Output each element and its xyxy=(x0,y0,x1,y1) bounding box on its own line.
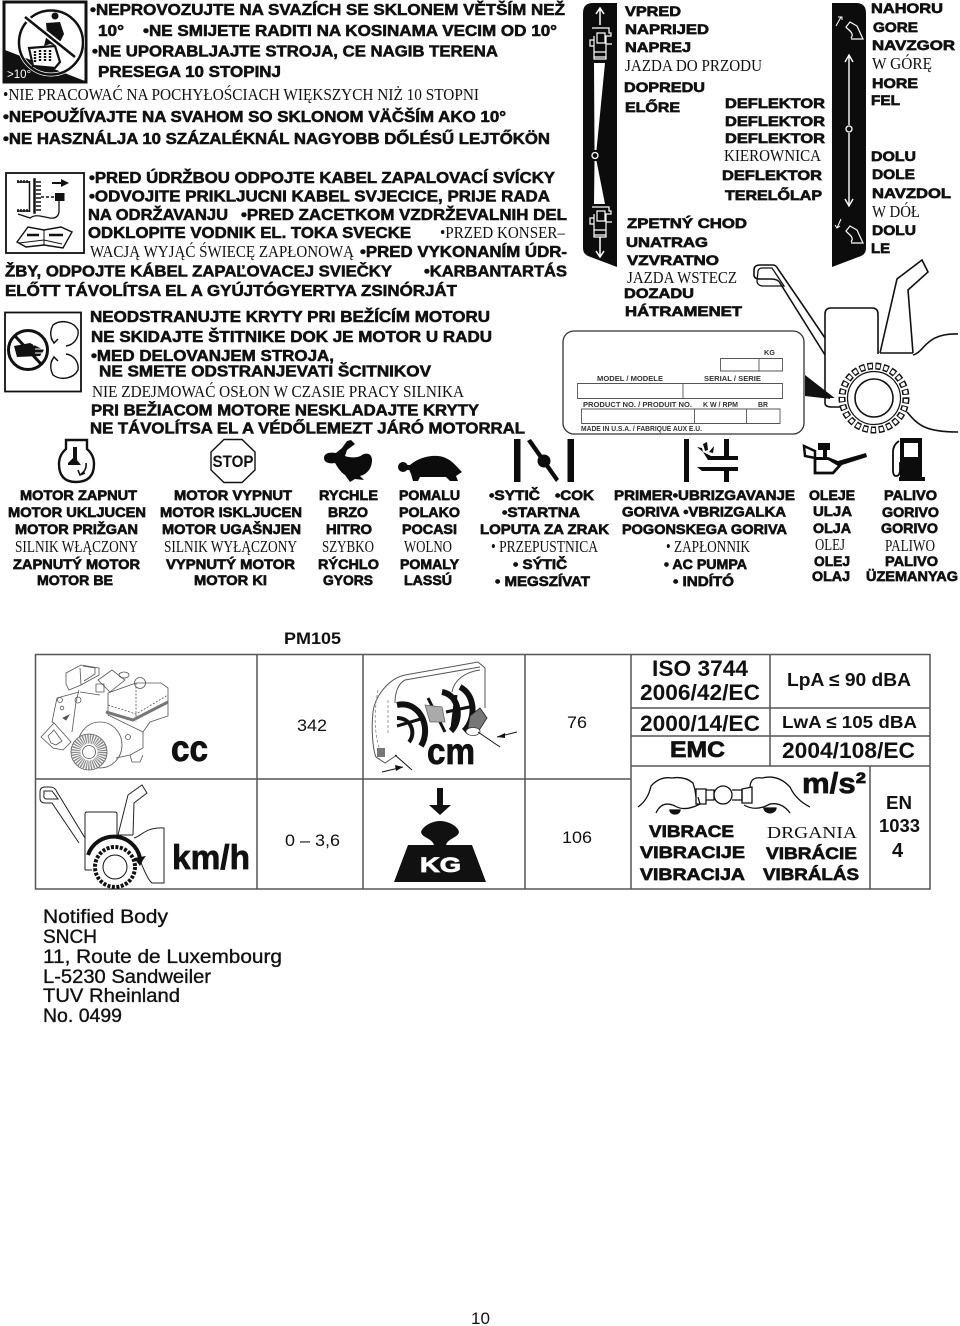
panel: model plate: PRODUCT NO. / PRODUIT NO. xyxy=(583,400,692,409)
label: motor off: VYPNUTÝ MOTOR xyxy=(166,555,295,572)
standards cells: 2004/108/EC xyxy=(782,738,915,763)
guard warning text: NE TÁVOLÍTSA EL A VÉDŐLEMEZT JÁRÓ MOTORRAL xyxy=(90,420,525,438)
up labels xyxy=(871,0,955,108)
label: motor on: ZAPNUTÝ MOTOR xyxy=(13,555,140,572)
icon: forward reverse bar xyxy=(583,3,617,267)
panel: model plate: K W / RPM xyxy=(703,400,738,409)
icon: weight xyxy=(394,788,486,882)
label: fuel xyxy=(866,487,958,584)
label: slow xyxy=(399,487,460,588)
maintenance warning text: ŽBY, ODPOJTE KÁBEL ZAPAĽOVACEJ SVIEČKY xyxy=(5,262,392,280)
label: primer xyxy=(614,487,795,589)
label: motor off: MOTOR ISKLJUCEN xyxy=(160,504,302,520)
maintenance warning text: •KARBANTARTÁS xyxy=(424,264,567,280)
label: fuel: GORIVO xyxy=(881,520,938,536)
forward labels: NAPREJ xyxy=(625,39,691,55)
label: primer: • INDÍTÓ xyxy=(673,572,734,589)
panel: model plate: BR xyxy=(758,400,769,409)
down labels: DOLE xyxy=(872,166,915,182)
reverse labels: DOZADU xyxy=(624,285,694,301)
down labels: W DÓŁ xyxy=(872,202,920,221)
icon: up down bar xyxy=(832,3,866,267)
deflector labels: KIEROWNICA xyxy=(724,146,822,165)
maintenance warning text: WACJĄ WYJĄĆ ŚWIECĘ ZAPŁONOWĄ xyxy=(90,242,355,261)
notified body address: No. 0499 xyxy=(43,1006,122,1027)
panel: guard warning xyxy=(5,308,525,438)
unit: kilometres per hour: km/h xyxy=(172,839,250,877)
icon: keep guards on xyxy=(5,312,81,392)
table grid xyxy=(36,654,930,889)
icon: vibration hands xyxy=(638,777,810,814)
standards cells: 2006/42/EC xyxy=(640,680,760,705)
model heading: PM105 xyxy=(284,630,341,648)
panel: model plate: MADE IN U.S.A. / FABRIQUE AUX E.U. xyxy=(581,424,702,433)
icon: speed machine xyxy=(40,785,164,887)
label: fuel: PALIVO xyxy=(884,487,937,503)
label: slow: POMALY xyxy=(400,556,460,572)
slope warning text: •NEPOUŽÍVAJTE NA SVAHOM SO SKLONOM VÄČŠÍM AKO 10° xyxy=(3,108,506,126)
label: oil xyxy=(809,487,855,584)
down labels xyxy=(871,148,952,256)
deflector labels xyxy=(722,95,825,203)
panel: model plate: SERIAL / SERIE xyxy=(704,374,761,383)
up labels: NAVZGOR xyxy=(872,37,955,53)
vibration labels: VIBRACIJE xyxy=(640,844,745,862)
reverse labels: UNATRAG xyxy=(626,234,708,250)
label: choke: •COK xyxy=(555,487,594,503)
down labels: DOLU xyxy=(872,222,916,238)
guard warning text xyxy=(90,308,525,438)
value: speed range: 0 – 3,6 xyxy=(285,832,340,850)
deflector labels: DEFLEKTOR xyxy=(725,130,825,146)
label: fuel: PALIVO xyxy=(885,553,938,569)
vibration standard: EN xyxy=(886,793,912,813)
panel: specifications table xyxy=(36,654,930,889)
forward labels: DOPREDU xyxy=(624,79,705,95)
label: choke: •STARTNA xyxy=(502,504,580,520)
icon: primer xyxy=(684,439,738,482)
label: fast: RYCHLE xyxy=(319,487,378,503)
label: fast: BRZO xyxy=(328,504,368,520)
notified body address: TUV Rheinland xyxy=(43,986,180,1007)
panel: slope warning xyxy=(3,1,565,148)
forward labels: VPRED xyxy=(625,3,681,19)
label: oil: OLAJ xyxy=(812,568,850,584)
icon: rabbit fast xyxy=(324,440,372,482)
label: choke xyxy=(480,486,609,589)
panel: model plate xyxy=(563,331,804,434)
icon: auger xyxy=(372,662,517,772)
label: motor off: MOTOR UGAŠNJEN xyxy=(162,520,301,537)
forward labels xyxy=(624,3,762,115)
label: motor off: MOTOR VYPNUT xyxy=(174,487,292,503)
snow blower outline xyxy=(754,260,958,432)
label: motor on xyxy=(8,487,146,588)
standards cells: ISO 3744 xyxy=(652,656,749,681)
deflector labels: TERELŐLAP xyxy=(725,186,822,203)
label: motor off xyxy=(160,487,302,588)
icon: motor on xyxy=(59,440,94,482)
value: 342: 342 xyxy=(297,717,327,735)
guard warning text: •MED DELOVANJEM STROJA, xyxy=(91,348,334,365)
icon: oil can xyxy=(804,443,867,473)
standards cells: 2000/14/EC xyxy=(640,711,760,736)
vibration standard: 4 xyxy=(892,840,904,862)
down labels: NAVZDOL xyxy=(872,185,952,201)
vibration standard: 1033 xyxy=(879,816,920,836)
label: motor on: MOTOR ZAPNUT xyxy=(20,487,137,503)
label: oil: ULJA xyxy=(813,503,852,519)
label: primer: • AC PUMPA xyxy=(664,556,747,572)
maintenance warning text: •PRED VYKONANÍM ÚDR- xyxy=(360,243,567,261)
label: fuel: GORIVO xyxy=(882,504,939,520)
maintenance warning text: NA ODRŽAVANJU xyxy=(88,206,228,224)
notified body address: SNCH xyxy=(43,927,97,948)
forward labels: NAPRIJED xyxy=(625,21,709,37)
unit: metres per second squared: m/s² xyxy=(802,768,866,800)
up labels: HORE xyxy=(872,75,918,91)
label: slow: POMALU xyxy=(399,487,460,503)
panel: forward and reverse control xyxy=(583,3,762,319)
up labels: GORE xyxy=(873,19,918,35)
reverse labels: HÁTRAMENET xyxy=(625,303,743,319)
vibration labels: DRGANIA xyxy=(767,823,858,842)
maintenance warning text: •PRED ZACETKOM VZDRŽEVALNIH DEL xyxy=(241,206,567,224)
icon: no slope above 10 degrees: >10° xyxy=(7,69,31,81)
label: fuel: ÜZEMANYAG xyxy=(866,568,958,584)
value: 106: 106 xyxy=(562,829,592,847)
label: slow: WOLNO xyxy=(404,537,452,556)
label: fast xyxy=(318,487,379,588)
maintenance warning text: •PRED ÚDRŽBOU ODPOJTE KABEL ZAPALOVACÍ SVÍCKY xyxy=(89,169,555,187)
label: motor on: MOTOR PRIŽGAN xyxy=(15,520,138,537)
panel: model plate: KG xyxy=(764,348,775,357)
icon: choke xyxy=(514,439,574,482)
vibration labels: VIBRACIJA xyxy=(640,866,745,884)
icon labels row xyxy=(8,486,958,589)
vibration standard xyxy=(879,793,920,862)
forward labels: ELŐRE xyxy=(625,98,680,115)
up labels: NAHORU xyxy=(871,0,943,16)
label: slow: POCASI xyxy=(402,521,457,537)
standards cells: LpA ≤ 90 dBA xyxy=(787,669,911,690)
label: primer: • ZAPŁONNIK xyxy=(666,537,751,556)
forward labels: JAZDA DO PRZODU xyxy=(625,56,762,75)
guard warning text: NIE ZDEJMOWAĆ OSŁON W CZASIE PRACY SILNIKA xyxy=(92,382,465,401)
panel: maintenance warning xyxy=(5,169,567,300)
standards cells: EMC xyxy=(670,737,725,762)
icon: stop sign xyxy=(211,440,255,482)
slope warning text: •NE HASZNÁLJA 10 SZÁZALÉKNÁL NAGYOBB DŐLÉSŰ LEJTŐKÖN xyxy=(3,130,550,148)
slope warning text: •NE UPORABLJAJTE STROJA, CE NAGIB TERENA xyxy=(92,44,498,60)
value: 76: 76 xyxy=(567,714,587,732)
maintenance warning text: ODKLOPITE VODNIK EL. TOKA SVECKE xyxy=(88,225,411,242)
label: fast: SZYBKO xyxy=(322,537,374,556)
label: slow: POLAKO xyxy=(399,504,460,520)
standards cells: LwA ≤ 105 dBA xyxy=(782,712,917,732)
icon: spark plug and manual xyxy=(6,173,84,253)
reverse labels: ZPETNÝ CHOD xyxy=(627,214,747,231)
up labels: FEL xyxy=(871,92,900,108)
standards cells xyxy=(640,656,917,763)
label: primer: GORIVA •VBRIZGALKA xyxy=(622,504,786,520)
label: fuel: PALIWO xyxy=(885,536,935,555)
label: fast: HITRO xyxy=(326,521,372,537)
label: oil: OLEJ xyxy=(815,535,845,554)
slope warning text: •NE SMIJETE RADITI NA KOSINAMA VECIM OD 10° xyxy=(143,23,557,40)
maintenance warning text xyxy=(5,169,567,300)
up labels: W GÓRĘ xyxy=(872,54,932,73)
label: fast: RÝCHLO xyxy=(318,555,379,572)
label: oil: OLJA xyxy=(813,520,851,536)
deflector labels: DEFLEKTOR xyxy=(725,95,825,111)
reverse labels xyxy=(624,214,747,319)
notified body address: 11, Route de Luxembourg xyxy=(43,947,282,968)
label: motor on: MOTOR BE xyxy=(37,572,113,588)
icon: stop sign: STOP xyxy=(212,453,254,471)
icon: no slope above 10 degrees xyxy=(4,2,86,82)
label: choke: •SYTIČ xyxy=(489,486,540,503)
notified body address xyxy=(43,907,282,1027)
label: choke: • MEGSZÍVAT xyxy=(495,573,590,589)
icon: turtle slow xyxy=(398,456,462,481)
label: motor off: SILNIK WYŁĄCZONY xyxy=(164,537,297,556)
down labels: LE xyxy=(871,240,890,256)
panel: chute up and down control xyxy=(832,0,955,267)
icon: fuel pump xyxy=(893,438,925,481)
vibration labels: VIBRACE xyxy=(649,823,734,841)
reverse labels: VZVRATNO xyxy=(627,252,719,268)
vibration labels: VIBRÁLÁS xyxy=(763,865,859,884)
maintenance warning text: •PRZED KONSER– xyxy=(440,223,565,242)
label: primer: POGONSKEGA GORIVA xyxy=(622,521,787,537)
maintenance warning text: ELŐTT TÁVOLÍTSA EL A GYÚJTÓGYERTYA ZSINÓRJÁT xyxy=(5,282,458,300)
label: motor on: MOTOR UKLJUCEN xyxy=(8,504,146,520)
slope warning text: •NEPROVOZUJTE NA SVAZÍCH SE SKLONEM VĚTŠÍM NEŽ xyxy=(90,1,565,19)
down labels: DOLU xyxy=(871,148,916,164)
icon: engine xyxy=(41,665,168,770)
label: choke: • SÝTIČ xyxy=(513,555,567,572)
label: motor on: SILNIK WŁĄCZONY xyxy=(15,537,138,556)
guard warning text: NEODSTRANUJTE KRYTY PRI BEŽÍCÍM MOTORU xyxy=(90,308,490,326)
deflector labels: DEFLEKTOR xyxy=(722,167,822,183)
slope warning text: PRESEGA 10 STOPINJ xyxy=(98,64,281,81)
unit: cubic centimetres: cc xyxy=(171,728,208,769)
notified body address: L-5230 Sandweiler xyxy=(43,967,212,988)
slope warning text: 10° xyxy=(98,23,124,40)
label: choke: • PRZEPUSTNICA xyxy=(491,537,599,556)
label: primer: PRIMER•UBRIZGAVANJE xyxy=(614,487,795,503)
slope warning text: •NIE PRACOWAĆ NA POCHYŁOŚCIACH WIĘKSZYCH NIŻ 10 STOPNI xyxy=(3,85,479,104)
label: motor off: MOTOR KI xyxy=(194,572,267,588)
guard warning text: NE SKIDAJTE ŠTITNIKE DOK JE MOTOR U RADU xyxy=(91,328,492,346)
notified body address: Notified Body xyxy=(43,907,169,928)
vibration labels xyxy=(640,823,859,884)
vibration labels: VIBRÁCIE xyxy=(766,844,857,863)
deflector labels: DEFLEKTOR xyxy=(725,113,825,129)
label: oil: OLEJ xyxy=(814,553,850,569)
slope warning text xyxy=(3,1,565,148)
panel: model plate: MODEL / MODELE xyxy=(597,374,663,383)
unit: centimetres: cm xyxy=(427,731,475,772)
guard warning text: NE SMETE ODSTRANJEVATI ŠCITNIKOV xyxy=(99,362,432,380)
label: oil: OLEJE xyxy=(809,487,855,503)
guard warning text: PRI BEŽIACOM MOTORE NESKLADAJTE KRYTY xyxy=(91,402,479,420)
label: choke: LOPUTA ZA ZRAK xyxy=(480,521,609,537)
icon: weight: KG xyxy=(420,854,461,877)
maintenance warning text: •ODVOJITE PRIKLJUCNI KABEL SVJECICE, PRIJE RADA xyxy=(89,188,550,206)
label: fast: GYORS xyxy=(323,572,373,588)
reverse labels: JAZDA WSTECZ xyxy=(627,268,737,287)
label: slow: LASSÚ xyxy=(404,571,452,588)
